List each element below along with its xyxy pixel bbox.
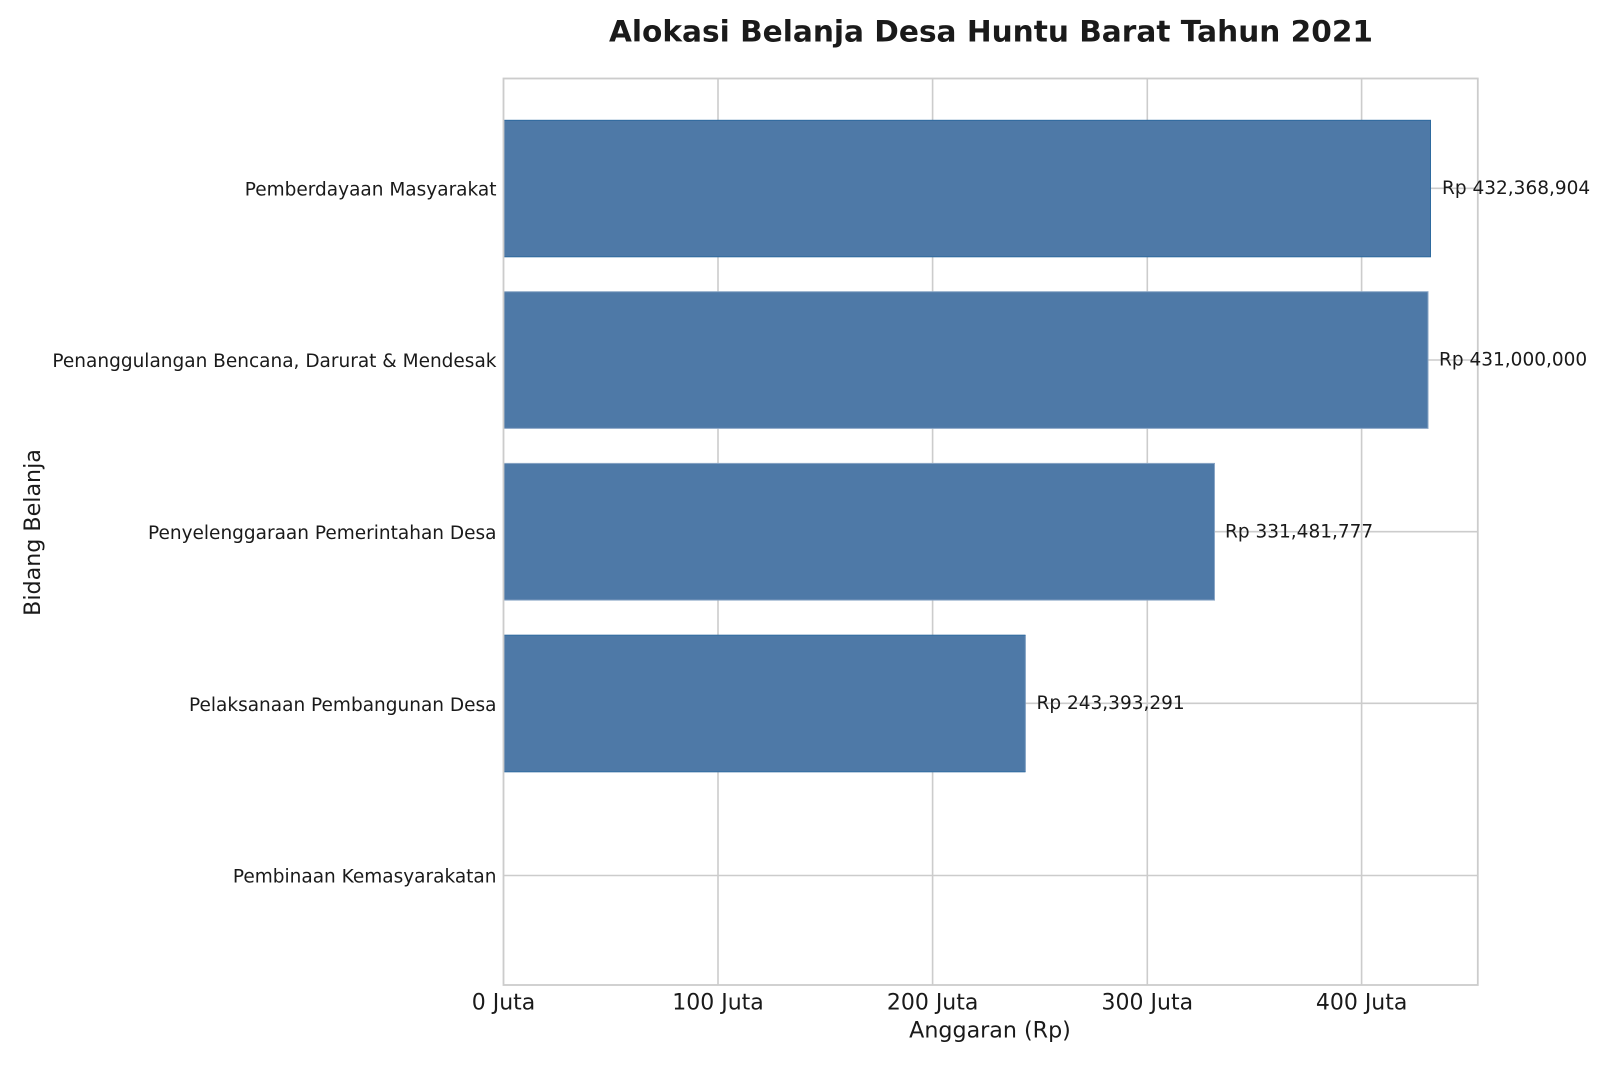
y axis category labels: Penanggulangan Bencana, Darurat & Mendesak [52, 351, 497, 372]
y axis category labels: Pemberdayaan Masyarakat [245, 179, 496, 200]
y axis category labels: Pembinaan Kemasyarakatan [233, 866, 496, 887]
x axis title: Anggaran (Rp) [909, 1018, 1071, 1044]
value label: Penanggulangan Bencana: Rp 431,000,000 [1439, 350, 1587, 371]
bar: Pemberdayaan Masyarakat [504, 120, 1430, 257]
y axis category labels [52, 179, 497, 887]
x axis tick labels: 0 Juta [472, 990, 535, 1016]
value label: Penyelenggaraan Pemerintahan Desa: Rp 331,481,777 [1225, 521, 1373, 542]
bar: Pelaksanaan Pembangunan Desa [504, 635, 1025, 772]
bar: Penanggulangan Bencana [504, 292, 1428, 428]
bar chart [504, 78, 1590, 985]
x axis tick labels: 200 Juta [887, 990, 978, 1016]
y axis category labels: Penyelenggaraan Pemerintahan Desa [148, 523, 496, 544]
x axis tick labels: 300 Juta [1102, 990, 1193, 1016]
value label: Pelaksanaan Pembangunan Desa: Rp 243,393,291 [1036, 693, 1185, 714]
title: Alokasi Belanja Desa Huntu Barat Tahun 2021 [609, 14, 1373, 48]
value label: Pemberdayaan Masyarakat: Rp 432,368,904 [1442, 178, 1590, 199]
x axis tick labels [472, 990, 1407, 1016]
x axis tick labels: 100 Juta [672, 990, 764, 1016]
y axis category labels: Pelaksanaan Pembangunan Desa [189, 695, 496, 716]
bar: Penyelenggaraan Pemerintahan Desa [504, 463, 1214, 600]
plot frame [504, 78, 1478, 985]
y axis title: Bidang Belanja [20, 449, 46, 616]
x axis tick labels: 400 Juta [1316, 990, 1407, 1016]
